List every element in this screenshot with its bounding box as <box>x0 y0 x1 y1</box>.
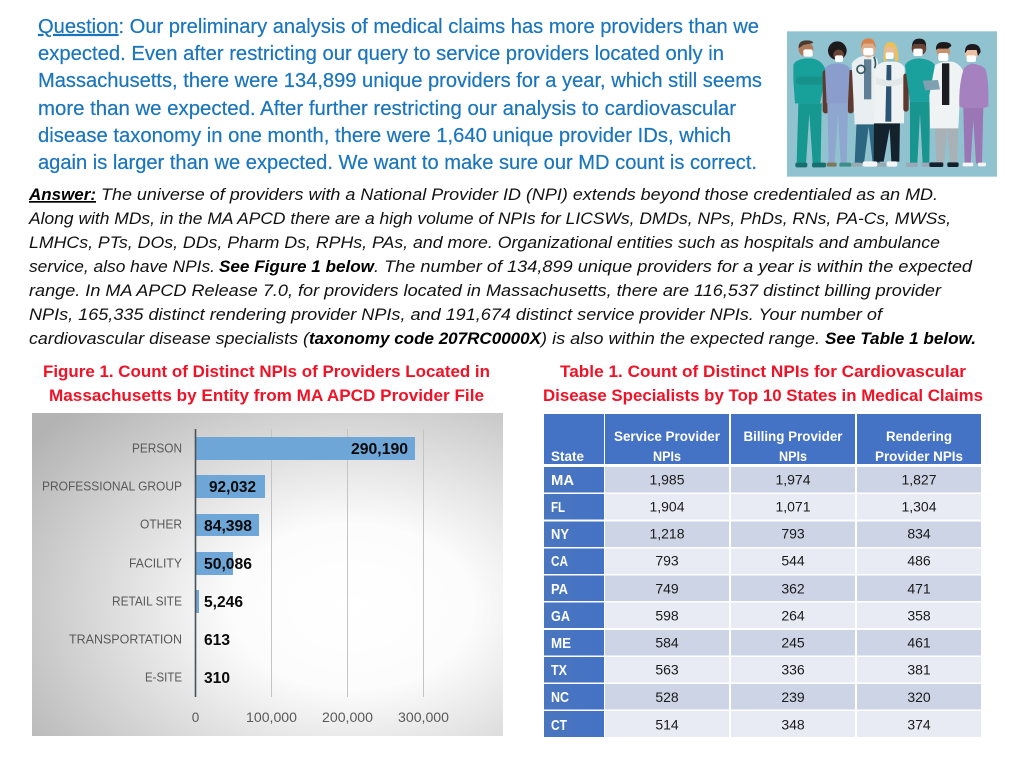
row NC: 320 <box>907 689 931 705</box>
row MA: 1,974 <box>775 472 811 488</box>
row TX: 563 <box>655 662 679 678</box>
table 1 heading <box>543 362 983 405</box>
x axis labels: 0 <box>192 710 199 725</box>
row FL <box>544 494 981 520</box>
bars <box>196 437 415 613</box>
value labels: 613 <box>204 632 230 649</box>
row ME <box>544 630 981 656</box>
person: male doctor with tablet <box>923 42 965 167</box>
table header: Provider NPIs <box>875 449 963 464</box>
category labels: RETAIL SITE <box>112 594 182 608</box>
row NY <box>544 522 981 547</box>
row CT: 348 <box>781 716 805 732</box>
person: teal scrubs <box>793 40 826 167</box>
row MA: 1,827 <box>901 472 937 488</box>
figure 1 heading <box>43 362 490 405</box>
row GA: 598 <box>655 608 679 624</box>
category labels: PROFESSIONAL GROUP <box>42 478 182 494</box>
value labels: 50,086 <box>204 556 252 573</box>
category labels <box>42 440 182 684</box>
x axis labels: 300,000 <box>398 710 449 725</box>
table header: Billing Provider <box>744 429 843 444</box>
answer text block: Answer: <box>28 185 96 204</box>
person: female doctor in white coat <box>863 42 905 167</box>
row PA: PA <box>551 582 568 598</box>
row ME: 461 <box>907 634 931 650</box>
answer text block: range. In MA APCD Release 7.0, for providers located in Massachusetts, there are 116,537 distinct billing provider <box>29 281 942 300</box>
question text block: again is larger than we expected. We want to make sure our MD count is correct. <box>38 152 757 174</box>
table header: NPIs <box>779 449 807 464</box>
person: periwinkle scrubs <box>823 41 854 167</box>
answer text block: service, also have NPIs. <box>29 257 215 276</box>
table: distinct NPIs by state <box>544 414 981 737</box>
row CT: CT <box>551 718 567 734</box>
category labels: TRANSPORTATION <box>69 632 182 646</box>
category labels: OTHER <box>140 516 182 532</box>
answer text block: Along with MDs, in the MA APCD there are a high volume of NPIs for LICSWs, DMDs, NPs, PhDs, RNs, PA-Cs, MWSs, <box>28 209 951 228</box>
row PA: 471 <box>907 580 931 596</box>
table 1 heading: Table 1. Count of Distinct NPIs for Cardiovascular <box>560 362 966 381</box>
row CA: 544 <box>781 552 805 568</box>
row CA: CA <box>551 554 568 570</box>
row GA: GA <box>551 609 570 625</box>
figure 1 heading: Massachusetts by Entity from MA APCD Provider File <box>49 386 484 405</box>
row ME: 245 <box>781 634 805 650</box>
x axis labels <box>192 710 449 725</box>
answer text block: ) is also within the expected range. <box>539 329 820 348</box>
answer text block: LMHCs, PTs, DOs, DDs, Pharm Ds, RPHs, PAs, and more. Organizational entities such as hospitals and ambulance <box>29 233 940 252</box>
question text block: Question: Our preliminary analysis of medical claims has more providers than we <box>38 16 759 38</box>
category labels: E-SITE <box>145 670 182 684</box>
value labels: 84,398 <box>204 518 252 535</box>
row CT: 514 <box>655 716 679 732</box>
table header: Service Provider <box>614 429 721 444</box>
row ME: 584 <box>655 634 679 650</box>
value labels: 310 <box>204 670 230 687</box>
person: male doctor with stethoscope <box>852 38 886 167</box>
category labels: FACILITY <box>129 556 182 570</box>
row NY: 793 <box>781 526 805 542</box>
person: purple scrubs <box>959 44 988 166</box>
row FL: FL <box>551 500 565 516</box>
row TX <box>544 657 981 682</box>
answer text block: The universe of providers with a National Provider ID (NPI) extends beyond those credentialed as an MD. <box>101 185 938 204</box>
table header <box>544 414 981 464</box>
row NC: 239 <box>781 689 805 705</box>
answer text block: cardiovascular disease specialists ( <box>29 329 311 348</box>
value labels: 92,032 <box>209 479 256 496</box>
row NY: NY <box>551 527 569 543</box>
question text block: expected. Even after restricting our query to service providers located only in <box>38 43 724 65</box>
row NC: 528 <box>655 689 679 705</box>
row GA <box>544 602 981 628</box>
table header: State <box>551 449 584 464</box>
x axis labels: 200,000 <box>322 710 373 725</box>
row PA: 749 <box>655 580 679 596</box>
row FL: 1,071 <box>775 498 811 514</box>
row TX: 381 <box>907 662 931 678</box>
value labels: 290,190 <box>351 441 408 458</box>
answer text block: taxonomy code 207RC0000X <box>309 329 543 348</box>
row CA <box>544 548 981 574</box>
table header: NPIs <box>653 449 681 464</box>
answer text block <box>28 185 976 348</box>
row CT <box>544 711 981 737</box>
row PA <box>544 576 981 601</box>
row GA: 264 <box>781 608 805 624</box>
answer text block: NPIs, 165,335 distinct rendering provider NPIs, and 191,674 distinct service provider NPIs. Your number of <box>29 305 884 324</box>
bar chart: NPIs by entity <box>32 413 503 736</box>
answer text block: See Table 1 below. <box>825 329 976 348</box>
row NY: 1,218 <box>649 526 685 542</box>
category labels: PERSON <box>132 440 182 456</box>
row MA: 1,985 <box>649 472 685 488</box>
figure 1 heading: Figure 1. Count of Distinct NPIs of Providers Located in <box>43 362 490 381</box>
row CT: 374 <box>907 716 931 732</box>
x axis labels: 100,000 <box>246 710 297 725</box>
row NC <box>544 684 981 710</box>
row MA <box>544 467 981 492</box>
value labels <box>204 441 408 687</box>
answer text block: . The number of 134,899 unique providers for a year is within the expected <box>374 257 973 276</box>
illustration: medical staff in masks <box>787 31 997 177</box>
value labels: 5,246 <box>204 594 243 611</box>
row NC: NC <box>551 690 569 706</box>
row FL: 1,304 <box>901 498 937 514</box>
question text block: Massachusetts, there were 134,899 unique providers for a year, which still seems <box>38 70 762 92</box>
question text block: disease taxonomy in one month, there were 1,640 unique provider IDs, which <box>38 125 731 147</box>
row TX: 336 <box>781 662 805 678</box>
table 1 heading: Disease Specialists by Top 10 States in Medical Claims <box>543 386 983 405</box>
row CA: 486 <box>907 552 931 568</box>
row NY: 834 <box>907 526 931 542</box>
row TX: TX <box>551 663 567 679</box>
row FL: 1,904 <box>649 498 685 514</box>
row PA: 362 <box>781 580 805 596</box>
row CA: 793 <box>655 552 679 568</box>
row ME: ME <box>551 636 571 652</box>
question text block <box>38 16 762 174</box>
table header: Rendering <box>886 429 952 444</box>
row GA: 358 <box>907 608 931 624</box>
row MA: MA <box>551 473 575 489</box>
question text block: more than we expected. After further restricting our analysis to cardiovascular <box>38 98 736 120</box>
answer text block: See Figure 1 below <box>219 257 376 276</box>
person: teal scrubs, dark hair <box>903 39 935 167</box>
